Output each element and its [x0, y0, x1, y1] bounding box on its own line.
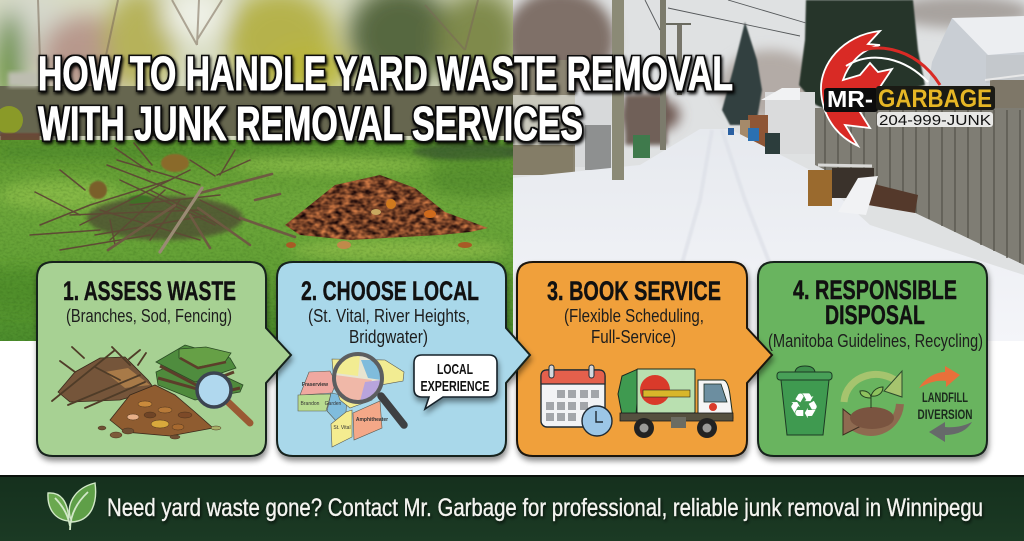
photo: snowy back alley — [505, 0, 1024, 341]
title: WITH JUNK REMOVAL SERVICES — [38, 98, 583, 151]
panel: 3. book service — [517, 262, 772, 456]
subheading: Bridgwater) — [349, 327, 428, 347]
icon: calendar with clock — [541, 365, 612, 436]
icon: sod stacks — [156, 345, 243, 400]
icon: landfill diversion arrows — [918, 366, 972, 442]
icon: neighbourhood map with magnifier: Brandon — [301, 401, 320, 407]
heading — [793, 275, 957, 330]
icon: green sprout — [48, 483, 96, 530]
heading: 1. ASSESS WASTE — [63, 276, 236, 306]
utility poles — [612, 0, 624, 180]
subheading: (St. Vital, River Heights, — [308, 306, 470, 326]
shrub — [0, 106, 23, 134]
blue bins — [748, 128, 759, 141]
icon: neighbourhood map with magnifier: Fraserview — [302, 382, 328, 388]
icon: neighbourhood map with magnifier — [298, 354, 404, 447]
panel: 1. assess waste — [37, 262, 291, 456]
icon: leaf pile — [98, 385, 221, 439]
icon: red maple swoosh — [821, 31, 940, 146]
panel: 4. responsible disposal — [758, 262, 987, 456]
evergreen tree — [799, 0, 925, 115]
heading: DISPOSAL — [825, 300, 925, 330]
subheading: (Flexible Scheduling, — [564, 306, 704, 326]
subheading: Full-Service) — [591, 327, 676, 347]
icon: compost cycle — [843, 371, 902, 435]
icon: neighbourhood map with magnifier: Amphitheater — [356, 417, 388, 423]
icon: landfill diversion arrows: DIVERSION — [918, 407, 972, 422]
logo: Mr. Garbage — [821, 31, 995, 146]
logo text — [824, 85, 995, 129]
dark bin — [765, 133, 780, 154]
white house — [928, 16, 1024, 90]
lawn — [0, 140, 513, 341]
distant spruce — [722, 22, 762, 125]
subheading: (Branches, Sod, Fencing) — [66, 306, 232, 326]
icon: garbage truck — [618, 369, 733, 438]
discarded furniture in the snow — [808, 165, 918, 215]
leaf pile — [285, 175, 488, 249]
far houses — [625, 95, 667, 145]
fence — [0, 86, 513, 136]
subheading — [308, 306, 470, 347]
icon: branch pile — [52, 347, 155, 408]
photo: spring yard with yard waste piles — [0, 0, 530, 341]
logo text: GARBAGE — [878, 85, 992, 113]
wood fence — [815, 75, 1024, 265]
heading: 3. BOOK SERVICE — [547, 276, 721, 306]
icon: recycling bin: ♻ — [788, 387, 820, 427]
logo text: 204-999-JUNK — [879, 112, 991, 129]
panel: 2. choose local — [277, 262, 530, 456]
heading: 2. CHOOSE LOCAL — [301, 276, 479, 306]
callout: local experience — [414, 355, 497, 409]
callout: local experience: EXPERIENCE — [420, 378, 490, 395]
left garage — [513, 60, 575, 175]
branch pile — [30, 143, 295, 252]
subheading — [564, 306, 704, 347]
footer banner — [0, 475, 1024, 541]
callout: local experience: LOCAL — [437, 361, 473, 378]
heading: 4. RESPONSIBLE — [793, 275, 957, 305]
logo text: MR- — [827, 86, 873, 112]
snow lane — [513, 129, 1024, 341]
icon: neighbourhood map with magnifier: St. Vital — [333, 425, 351, 431]
icon: landfill diversion arrows: LANDFILL — [922, 390, 968, 405]
green bin — [633, 135, 650, 158]
title — [38, 48, 733, 151]
title: HOW TO HANDLE YARD WASTE REMOVAL — [38, 48, 733, 101]
icon: neighbourhood map with magnifier: Garden — [325, 401, 342, 407]
icon: magnifying glass — [197, 373, 250, 423]
icon: recycling bin — [777, 366, 832, 435]
